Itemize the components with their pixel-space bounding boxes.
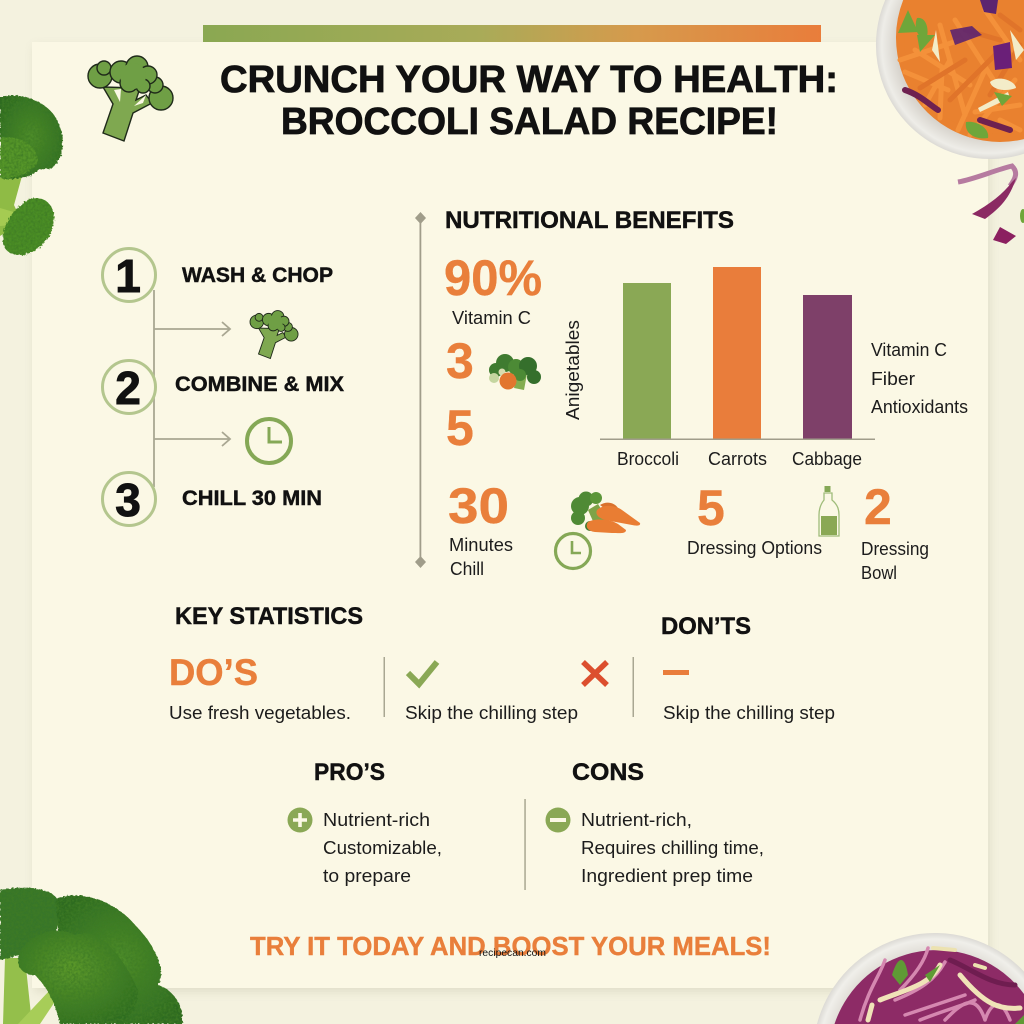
icon: minus mark (663, 670, 689, 675)
stat: 5 dressing options (687, 480, 822, 558)
pros list: to prepare (323, 866, 411, 886)
panel: do's: DO’S (169, 652, 258, 693)
icon: check mark (408, 662, 437, 684)
column divider (632, 657, 634, 717)
stat: 5: 5 (446, 400, 474, 456)
cons list: Requires chilling time, (581, 838, 764, 858)
photo: carrot and cabbage salad bowl, top right (876, 0, 1024, 159)
title (220, 59, 838, 143)
stat: 3: 3 (446, 333, 474, 389)
stat: 30 minutes chill: Minutes (449, 535, 513, 555)
stat: 30 minutes chill: Chill (450, 559, 484, 579)
stat: 2 dressing bowl (861, 479, 929, 583)
pros list: Customizable, (323, 838, 442, 858)
icon: broccoli and carrots (571, 492, 640, 533)
chart legend (871, 340, 968, 417)
stat: 2 dressing bowl: Bowl (861, 563, 897, 583)
step 2: 2 (115, 362, 141, 414)
icon: dressing bottle (819, 486, 839, 536)
vertical divider with diamonds (415, 212, 426, 568)
text: skip step 1: Skip the chilling step (405, 703, 578, 723)
text: skip step 2: Skip the chilling step (663, 703, 835, 723)
step 3: CHILL 30 MIN (182, 487, 322, 510)
panel: cons (546, 759, 764, 886)
stat: 5 dressing options: 5 (697, 480, 725, 536)
icon: header broccoli (88, 56, 173, 141)
chart legend: Vitamin C (871, 340, 947, 360)
category labels (617, 449, 862, 469)
pros cons divider (524, 799, 526, 890)
icon: small broccoli (250, 311, 298, 359)
photo: broccoli lower left (0, 888, 183, 1024)
step 1: 1 (115, 250, 141, 302)
stat: 90% vitamin C: Vitamin C (452, 308, 531, 328)
cons list: Nutrient-rich, (581, 810, 692, 830)
icon: plus circle (288, 808, 312, 832)
bar: carrots (713, 267, 761, 439)
title: BROCCOLI SALAD RECIPE! (281, 101, 778, 143)
title: CRUNCH YOUR WAY TO HEALTH: (220, 59, 838, 101)
panel: pros (288, 759, 442, 886)
icon: clock (247, 419, 291, 463)
bar: broccoli (623, 283, 671, 439)
watermark: recipecan.com (479, 947, 546, 959)
photo: red cabbage bowl, bottom right (817, 933, 1024, 1024)
step 2 (102, 360, 344, 414)
step 3 (102, 472, 322, 526)
panel: do's: Use fresh vegetables. (169, 703, 351, 723)
bar: cabbage (803, 295, 852, 439)
step 3: 3 (115, 474, 141, 526)
panel: pros: PRO’S (314, 759, 385, 786)
stat: 30 minutes chill: 30 (448, 478, 509, 534)
step 1 (102, 248, 333, 302)
category labels: Broccoli (617, 449, 679, 469)
chart axis (600, 438, 875, 440)
icon: minus circle (546, 808, 570, 832)
step 1: WASH & CHOP (182, 264, 333, 287)
stat: 30 minutes chill (448, 478, 513, 579)
step connector line and arrows (154, 290, 230, 487)
step 2: COMBINE & MIX (175, 373, 344, 396)
icon: vegetable cluster (489, 354, 541, 390)
heading: key statistics: KEY STATISTICS (175, 603, 363, 630)
photo: broccoli upper left (0, 96, 63, 255)
column divider (384, 657, 385, 717)
pros list (323, 810, 442, 886)
category labels: Cabbage (792, 449, 862, 469)
chart legend: Fiber (871, 369, 915, 389)
pros list: Nutrient-rich (323, 810, 430, 830)
cons list: Ingredient prep time (581, 866, 753, 886)
panel: cons: CONS (572, 759, 644, 786)
photo: falling red cabbage pieces (958, 166, 1024, 244)
call to action: TRY IT TODAY AND BOOST YOUR MEALS! (250, 931, 771, 961)
y axis label: Anigetables (563, 320, 583, 420)
panel: do's (169, 652, 351, 723)
cons list (581, 810, 764, 886)
bar chart: vegetables (563, 267, 968, 469)
stat: 2 dressing bowl: 2 (864, 479, 892, 535)
top gradient bar (203, 25, 821, 42)
category labels: Carrots (708, 449, 767, 469)
stat: 5 dressing options: Dressing Options (687, 538, 822, 558)
heading: don'ts: DON’TS (661, 613, 751, 640)
icon: clock small (556, 534, 590, 568)
heading: nutritional benefits: NUTRITIONAL BENEFITS (445, 207, 734, 234)
chart legend: Antioxidants (871, 397, 968, 417)
icon: cross mark (583, 662, 607, 685)
panel: recipe steps (102, 248, 344, 526)
stat: 90% vitamin C: 90% (444, 250, 542, 306)
stat: 2 dressing bowl: Dressing (861, 539, 929, 559)
